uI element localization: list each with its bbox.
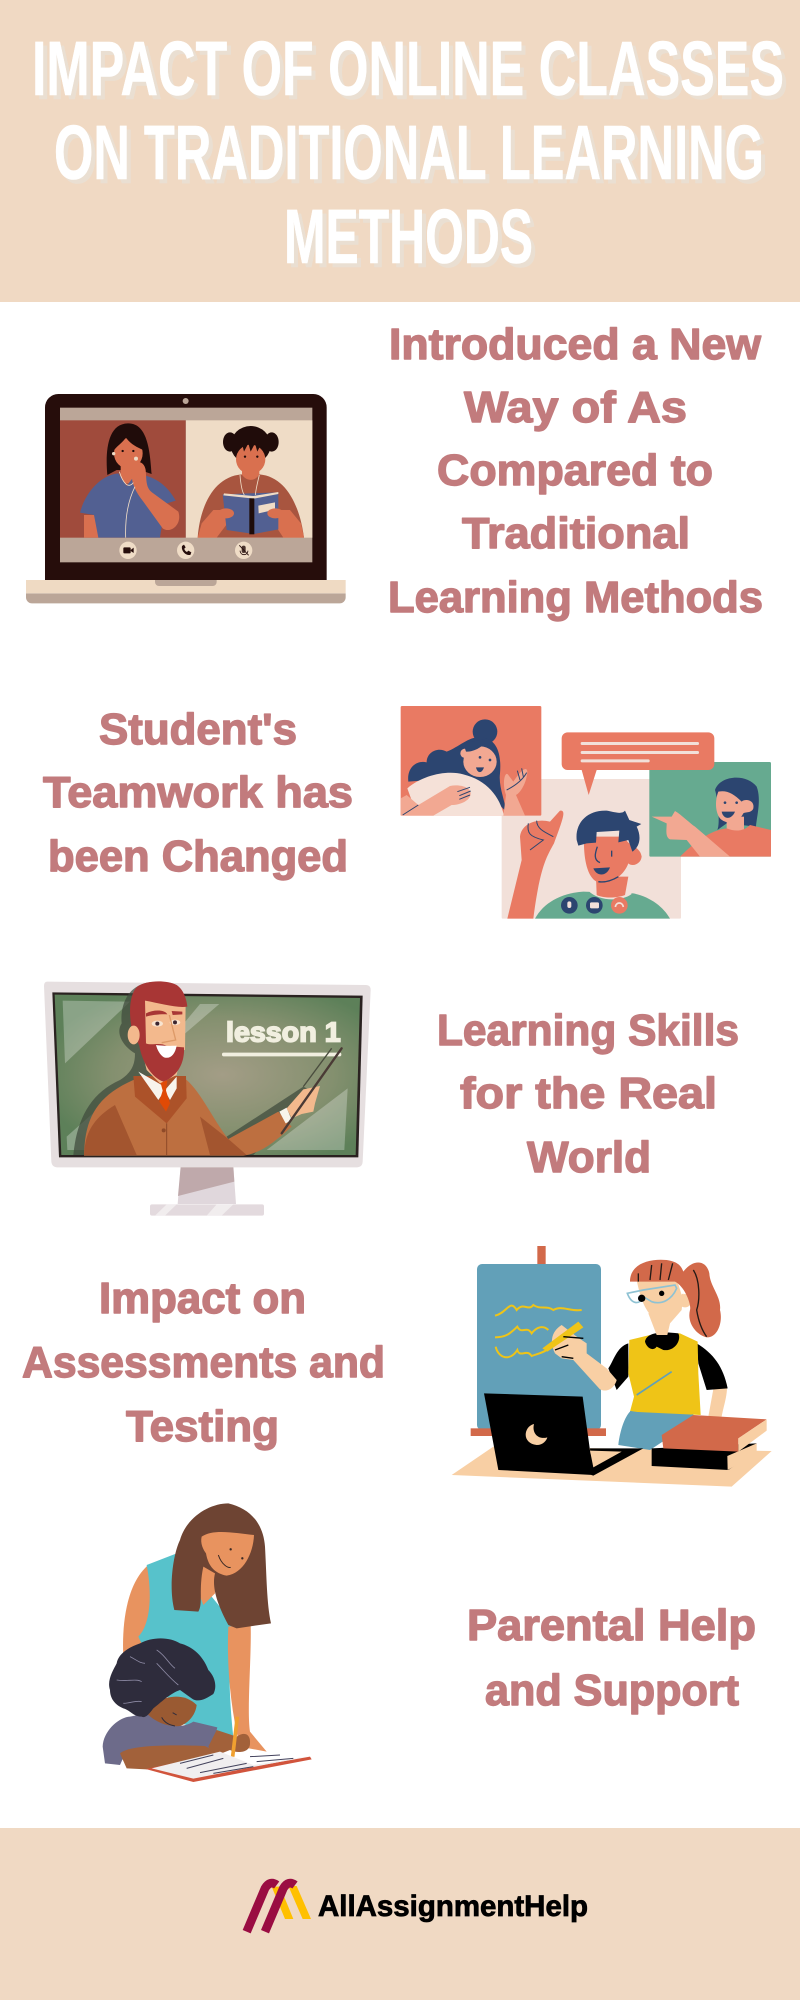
text block: real world skills: Learning Skills	[437, 1006, 739, 1055]
illustration: laptop video call	[26, 394, 346, 603]
pencil	[233, 1717, 237, 1757]
laptop lid	[45, 394, 327, 580]
title: METHODS	[284, 194, 533, 280]
blue board	[471, 1246, 606, 1436]
screen	[60, 408, 312, 562]
text block: real world skills: World	[527, 1133, 651, 1182]
teacher shadow	[73, 982, 313, 1155]
text block: parental help: Parental Help	[467, 1601, 756, 1650]
stack of books	[652, 1415, 767, 1470]
logo wordmark: AllAssignmentHelp	[318, 1890, 588, 1923]
text block: new way of learning: Compared to	[437, 446, 713, 495]
left video panel	[401, 706, 541, 816]
monitor stand	[150, 1167, 264, 1216]
right video pane	[186, 420, 312, 538]
speech bubble	[562, 732, 714, 795]
desk	[452, 1447, 772, 1487]
text block: real world skills: for the Real	[460, 1069, 717, 1118]
text block: new way of learning: Way of As	[464, 383, 687, 432]
footer band	[0, 1828, 800, 2000]
monitor frame	[44, 982, 371, 1167]
icon: phone button	[177, 542, 194, 559]
open notebook	[146, 1752, 312, 1782]
illustration: group video chat	[401, 706, 771, 919]
logo mark	[247, 1883, 311, 1932]
header band	[0, 0, 800, 302]
lesson 1 chalk text: lesson 1	[226, 1017, 341, 1048]
text block: new way of learning: Introduced a New	[389, 320, 762, 369]
man in center panel	[507, 811, 670, 919]
black laptop	[484, 1393, 643, 1476]
text block: assessments	[22, 1274, 385, 1451]
logo	[247, 1883, 588, 1932]
right video panel	[649, 762, 771, 857]
illustration: parent helping child	[103, 1503, 312, 1782]
icon: mute button	[235, 542, 252, 559]
text block: teamwork: been Changed	[48, 832, 348, 881]
child	[103, 1638, 250, 1769]
text block: teamwork	[43, 705, 353, 881]
text block: parental help: and Support	[485, 1666, 739, 1715]
chalkboard screen	[52, 992, 363, 1157]
glass reflections	[63, 1001, 348, 1150]
webcam	[183, 398, 189, 404]
text block: assessments: Impact on	[99, 1274, 306, 1323]
center video panel	[502, 779, 681, 919]
icon: camera button	[119, 542, 137, 559]
text block: new way of learning: Traditional	[462, 509, 690, 558]
text block: real world skills	[437, 1006, 739, 1182]
illustration: teacher on monitor	[44, 981, 371, 1216]
teacher figure	[542, 1260, 728, 1450]
text block: teamwork: Student's	[99, 705, 297, 754]
text block: new way of learning	[388, 320, 763, 622]
title	[32, 26, 784, 280]
left video pane	[60, 420, 186, 538]
text block: assessments: Assessments and	[22, 1338, 385, 1387]
text block: assessments: Testing	[126, 1402, 279, 1451]
laptop base	[26, 580, 346, 603]
mother	[123, 1503, 271, 1752]
text block: new way of learning: Learning Methods	[388, 573, 763, 622]
illustration: teacher at board	[452, 1246, 772, 1487]
teacher	[84, 981, 342, 1156]
text block: teamwork: Teamwork has	[43, 768, 353, 817]
text block: parental help	[467, 1601, 756, 1715]
